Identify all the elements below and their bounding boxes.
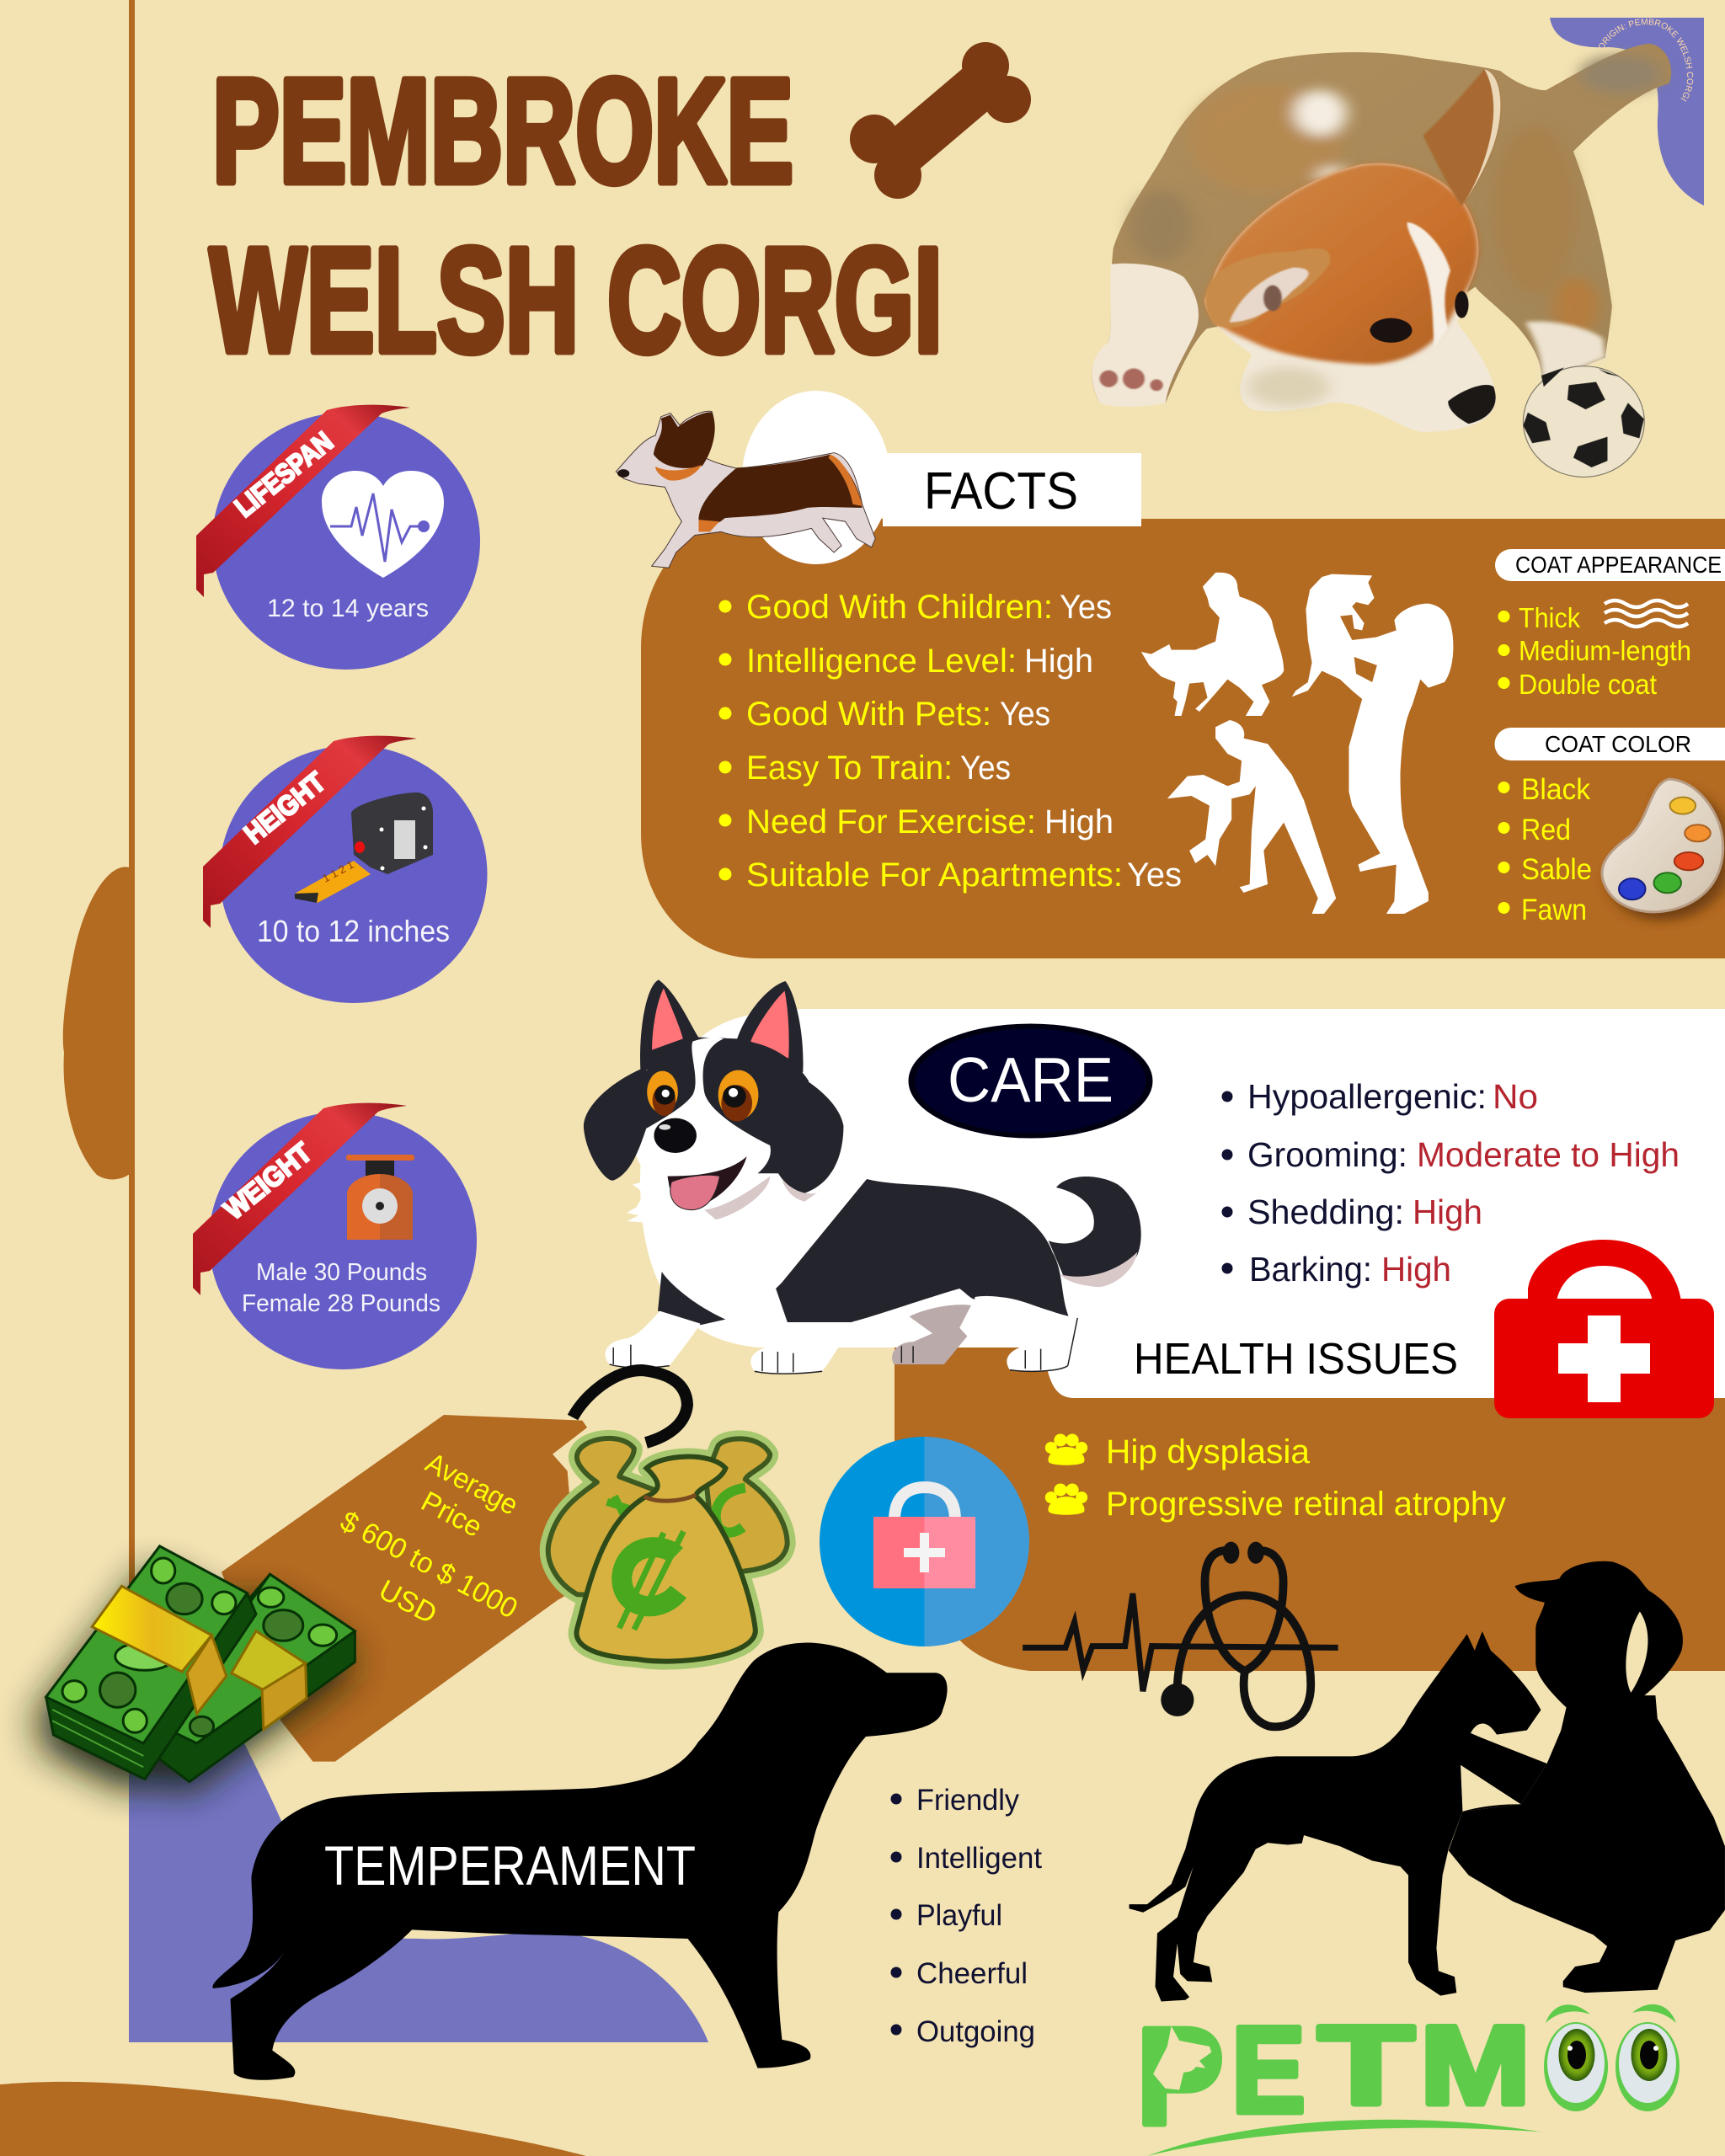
care list: No (1493, 1077, 1538, 1116)
icon: people with dogs silhouettes (1141, 573, 1453, 914)
care list: Moderate to High (1417, 1135, 1680, 1174)
temperament list (891, 1784, 1042, 2048)
ribbon: weight: WEIGHT (218, 1136, 318, 1225)
temperament list: Outgoing (916, 2015, 1035, 2048)
ears (640, 979, 804, 1072)
coat appearance (1495, 549, 1725, 700)
logo: PetMoo: E (1231, 2001, 1306, 2138)
coat color: Fawn (1521, 894, 1587, 926)
price text: $ 600 to $ 1000 (335, 1505, 523, 1625)
tail (1049, 1177, 1141, 1279)
origin corner badge (1550, 18, 1704, 205)
temperament list: Friendly (916, 1784, 1019, 1817)
floppy ears (584, 1067, 649, 1181)
coat color (1494, 728, 1725, 926)
fact list: Intelligence Level: (746, 643, 1017, 680)
fact list: Yes (1000, 696, 1050, 733)
temperament list: Cheerful (916, 1957, 1028, 1990)
ribbon: lifespan: LIFESPAN (228, 425, 339, 523)
ribbon: weight (193, 1103, 407, 1295)
illustration: cartoon corgi (584, 979, 1141, 1374)
temperament list: Playful (916, 1899, 1002, 1932)
icon: coat waves (1605, 600, 1688, 627)
coat color: Sable (1521, 853, 1592, 886)
logo: PetMoo: T (1318, 2004, 1414, 2128)
logo eyes (1544, 2004, 1680, 2111)
icon: heart with pulse (322, 471, 444, 578)
coat color: COAT COLOR (1545, 731, 1691, 757)
stat circle: height: 10 to 12 inches (257, 914, 450, 948)
icon: blue medical bag circle (820, 1437, 1029, 1646)
fact list: Suitable For Apartments: (746, 857, 1123, 894)
panel: health issues (895, 1347, 1725, 1671)
price text: Average (420, 1447, 523, 1522)
photo: corgi puppy with ball (1092, 44, 1671, 477)
fact list: Easy To Train: (746, 750, 953, 787)
lower-left blue panel (129, 1735, 708, 2042)
title: PEMBROKE (212, 49, 793, 214)
icon: stethoscope and pulse line (1023, 1542, 1338, 1726)
fact list: Yes (960, 750, 1011, 787)
panel: care (640, 1009, 1725, 1398)
stat circle: weight (193, 1103, 477, 1369)
care list: Hypoallergenic: (1247, 1077, 1487, 1116)
stat circle: height (203, 736, 487, 1003)
silhouette: temperament dog (212, 1643, 948, 2080)
icon: money bags (548, 1438, 788, 1662)
silhouette: person with dog (1130, 1561, 1725, 2001)
price text: USD (373, 1574, 442, 1630)
health issue list: Hip dysplasia (1106, 1433, 1311, 1470)
icon: paint palette (1602, 779, 1725, 921)
fact list: Good With Children: (746, 589, 1053, 626)
health issues heading: HEALTH ISSUES (1134, 1335, 1458, 1384)
fact list: Good With Pets: (746, 696, 991, 733)
logo: PetMoo: M (1420, 2004, 1530, 2128)
cedi symbol (619, 1531, 684, 1630)
eyes (647, 1071, 678, 1113)
dog head cutout in logo P (1153, 2026, 1211, 2089)
muzzle shadow (704, 1177, 820, 1219)
stat circle: lifespan: 12 to 14 years (267, 595, 429, 622)
ribbon: height: HEIGHT (238, 766, 331, 850)
stat circle: weight: Male 30 Pounds (256, 1259, 427, 1286)
bottom brown hump (0, 2082, 586, 2156)
price tag (222, 1370, 687, 1762)
care list (1221, 1077, 1680, 1289)
coat appearance: Thick (1519, 602, 1580, 633)
fact list: High (1024, 643, 1093, 680)
coat appearance: Double coat (1519, 669, 1657, 700)
care heading oval: CARE (948, 1044, 1114, 1115)
panel: facts (616, 391, 1725, 958)
care list: Grooming: (1247, 1135, 1407, 1174)
stat circle: lifespan (196, 405, 480, 670)
left vertical rule (129, 0, 135, 1777)
icon: bone (850, 42, 1031, 199)
ribbon: height (203, 736, 417, 928)
head (643, 1038, 809, 1173)
fact list: Yes (1060, 589, 1112, 626)
fact list (719, 589, 1182, 894)
health issue list: Progressive retinal atrophy (1106, 1486, 1506, 1523)
facts heading (883, 453, 1141, 526)
fact list: Yes (1127, 857, 1182, 894)
tag string (573, 1370, 687, 1443)
logo: PetMoo: P (1136, 1999, 1224, 2153)
logo swoosh (1147, 2120, 1541, 2156)
ribbon: lifespan (196, 405, 410, 597)
legs (606, 1311, 701, 1368)
white oval behind corgi (742, 391, 890, 564)
logo: PetMoo (1136, 1999, 1680, 2156)
silhouette: temperament dog: TEMPERAMENT (324, 1834, 696, 1897)
coat color: Red (1521, 814, 1571, 846)
icon: tape measure: 1 1 2 1 (320, 858, 356, 885)
care list: High (1413, 1193, 1482, 1231)
coat color: Black (1521, 773, 1590, 806)
icon: red first aid kit (1494, 1240, 1714, 1418)
care list: High (1381, 1250, 1451, 1289)
fact list: Need For Exercise: (746, 803, 1036, 841)
price text (335, 1447, 523, 1630)
care list: Shedding: (1247, 1193, 1404, 1231)
coat appearance: Medium-length (1519, 635, 1691, 666)
care heading oval (908, 1024, 1152, 1139)
facts heading: FACTS (924, 462, 1078, 520)
left brown oval tab (63, 867, 133, 1179)
body (774, 1179, 1070, 1322)
origin corner badge: ORIGIN: PEMBROKE WELSH CORGI (1599, 19, 1693, 102)
icon: weighing scale (346, 1155, 414, 1240)
nose and mouth (654, 1118, 697, 1153)
title (210, 49, 943, 383)
fact list: High (1044, 803, 1114, 841)
stat circle: weight: Female 28 Pounds (242, 1290, 441, 1317)
price text: Price (416, 1486, 488, 1544)
icon: cash stacks (38, 1546, 355, 1799)
care list: Barking: (1249, 1250, 1372, 1289)
chest (627, 1156, 867, 1328)
soccer ball (1523, 366, 1644, 477)
health issue list (1045, 1433, 1506, 1523)
icon: tape measure (295, 792, 433, 903)
rear inner leg (892, 1305, 971, 1364)
temperament list: Intelligent (916, 1842, 1042, 1875)
illustration: running corgi (616, 411, 875, 568)
title: WELSH CORGI (210, 218, 943, 383)
